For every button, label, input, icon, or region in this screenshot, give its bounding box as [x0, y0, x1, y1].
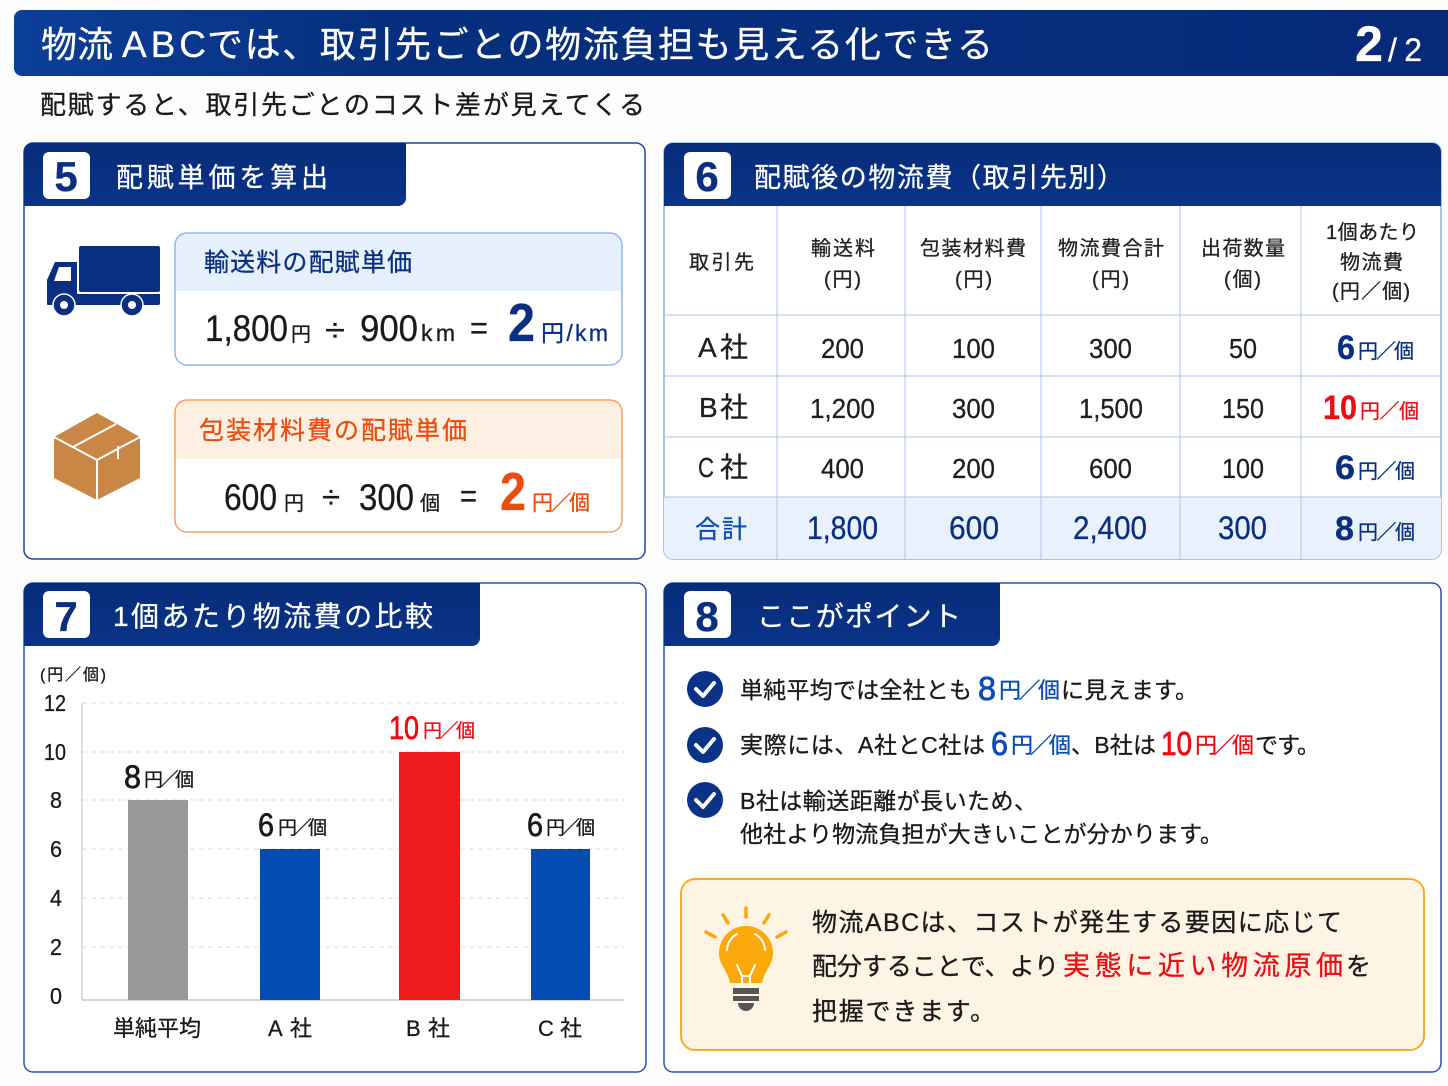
packaging unit price box: 300: [359, 477, 414, 518]
transport unit price box: km: [421, 320, 455, 346]
table row: B社: B: [699, 392, 718, 423]
panel 5 heading: 配賦単価を算出: [116, 163, 328, 193]
table row: total: 1,800: [807, 510, 878, 546]
table row: C社: 400: [821, 453, 864, 484]
point 3: [687, 782, 1223, 847]
title banner: [14, 10, 1448, 76]
table header row: (円): [1092, 269, 1129, 291]
table row: C社: 200: [952, 453, 995, 484]
bar: simple average: 円／個: [144, 769, 194, 791]
bar chart: 4: [50, 885, 62, 911]
callout text: を: [1346, 953, 1371, 981]
packaging unit price box: 円: [284, 493, 304, 515]
callout text: 把握できます。: [812, 998, 995, 1026]
bar: company B: 円／個: [423, 720, 475, 742]
table header row: [689, 221, 1419, 303]
packaging unit price box: 個: [420, 492, 440, 515]
icon: light bulb: [706, 908, 786, 1011]
table row: C社: [698, 449, 1415, 487]
packaging unit price box: [175, 400, 622, 532]
transport unit price box: 円: [291, 324, 311, 346]
panel 5: allocation unit price: [24, 143, 645, 559]
title: では、取引先ごとの物流負担も見える化できる: [207, 24, 993, 65]
table header row: 1個あたり: [1326, 221, 1419, 244]
panel 7 heading: 7: [54, 593, 78, 640]
table row: B社: 300: [952, 393, 995, 424]
bar chart: 2: [50, 934, 62, 960]
callout: [681, 879, 1424, 1050]
table grid: [664, 206, 1441, 559]
table row: A社: A: [698, 332, 717, 363]
table total row background: [664, 497, 1441, 559]
subtitle: 配賦すると、取引先ごとのコスト差が見えてくる: [40, 90, 645, 120]
panel 7 heading: [24, 583, 480, 646]
table row: A社: 200: [821, 333, 864, 364]
packaging unit price box: 包装材料費の配賦単価: [199, 417, 467, 445]
bar: simple average: 単純平均: [113, 1016, 201, 1041]
point 3: B社は輸送距離が長いため、: [740, 788, 1037, 814]
panel 6 heading: [664, 143, 1441, 206]
table header row: (円): [824, 269, 861, 291]
table row: C社: 6: [1335, 449, 1355, 487]
table row: total: 300: [1218, 510, 1267, 546]
point 1: 円／個: [999, 678, 1060, 703]
bar: company B: 10: [389, 710, 419, 746]
table row: total: [695, 510, 1415, 548]
table row: B社: 1,200: [810, 393, 875, 424]
packaging unit price box: =: [460, 478, 477, 514]
callout text: 実態に近い物流原価: [1063, 951, 1343, 981]
panel 6 heading: 6: [695, 153, 719, 200]
point 1: 8: [978, 670, 996, 707]
table row: A社: 50: [1229, 333, 1257, 364]
table row: A社: 円／個: [1358, 340, 1414, 363]
packaging unit price box: 600: [224, 477, 277, 518]
table row: C社: 円／個: [1358, 460, 1415, 483]
table row: B社: 社: [720, 392, 748, 423]
panel 8 heading: ここがポイント: [757, 601, 961, 632]
panel 8 heading: [664, 583, 1000, 646]
point 2: 円／個: [1011, 733, 1071, 758]
point 2: 実際には、A社とC社は: [740, 732, 985, 758]
bar chart: 6: [50, 836, 62, 862]
table row: C社: 社: [720, 452, 748, 483]
table header row: 取引先: [689, 251, 754, 274]
table row: A社: [698, 329, 1414, 367]
table row: B社: [699, 389, 1419, 427]
panel 7: cost per unit comparison: [24, 583, 646, 1072]
table row: A社: 6: [1337, 329, 1355, 367]
bar: simple average: [113, 759, 201, 1041]
table row: B社: 円／個: [1360, 400, 1419, 423]
table row: total: 合計: [695, 516, 747, 544]
table row: A社: 社: [720, 332, 748, 363]
table row: B社: 1,500: [1079, 393, 1143, 424]
page number: [1355, 16, 1422, 72]
title: 物流: [41, 24, 113, 65]
callout text: [812, 909, 1371, 1026]
transport unit price box: 1,800: [205, 308, 288, 349]
table row: C社: C: [698, 452, 714, 483]
panel 6 heading: 配賦後の物流費（取引先別）: [754, 163, 1124, 193]
table header row: 出荷数量: [1201, 237, 1285, 260]
bar chart: 10: [44, 739, 66, 765]
table row: total: 600: [949, 510, 999, 546]
callout text: 配分することで、より: [812, 953, 1059, 981]
table header row: 包装材料費: [920, 237, 1026, 260]
bar: company C: [527, 807, 595, 1041]
icon: truck: [47, 246, 160, 316]
transport unit price box: 輸送料の配賦単価: [204, 249, 412, 277]
callout text: 物流ABCは、コストが発生する要因に応じて: [812, 909, 1342, 937]
point 1: に見えます。: [1061, 677, 1198, 703]
table header row: 輸送料: [811, 237, 875, 260]
table header row: (円／個): [1332, 280, 1410, 303]
transport unit price box: [175, 233, 622, 365]
bar: company C: C社: [538, 1016, 582, 1041]
table row: A社: 100: [952, 333, 995, 364]
packaging unit price box: ÷: [322, 479, 340, 515]
packaging unit price box: 2: [500, 462, 526, 522]
bar: company A: [258, 807, 327, 1041]
panel 5 heading: 5: [54, 153, 78, 200]
table row: B社: 150: [1222, 393, 1264, 424]
transport unit price box: 2: [508, 293, 535, 353]
transport unit price box: ÷: [325, 312, 345, 348]
point 2: です。: [1255, 732, 1320, 758]
bar chart: 0: [50, 983, 62, 1009]
panel 6: logistics cost by customer: [664, 143, 1441, 559]
transport unit price box: 円/km: [541, 320, 608, 346]
panel 8: key points: [664, 583, 1441, 1072]
table header row: (円): [955, 269, 992, 291]
bar chart: [40, 666, 624, 1041]
table row: total: 2,400: [1073, 510, 1147, 546]
point 2: 6: [991, 725, 1008, 762]
bar chart: 12: [44, 690, 66, 716]
bar: company A: A社: [268, 1016, 312, 1041]
bar: company C: 6: [527, 807, 543, 843]
table row: C社: 100: [1222, 453, 1264, 484]
bar: company A: 円／個: [278, 817, 327, 839]
point 2: 10: [1161, 725, 1192, 762]
title: ABC: [122, 24, 206, 65]
packaging unit price box: 円／個: [532, 492, 590, 515]
bar: company A: 6: [258, 807, 274, 843]
point 1: [687, 670, 1198, 707]
point 2: [687, 725, 1320, 763]
panel 7 heading: 1個あたり物流費の比較: [113, 601, 433, 632]
table row: A社: 300: [1089, 333, 1132, 364]
bar: simple average: 8: [124, 759, 141, 795]
point 3: 他社より物流負担が大きいことが分かります。: [740, 821, 1223, 847]
page number: 2: [1355, 16, 1383, 72]
table row: total: 8: [1335, 510, 1354, 548]
panel 5 heading: [24, 143, 406, 206]
bar chart: (円／個): [40, 666, 106, 684]
point 2: 、B社は: [1071, 732, 1156, 758]
bar: company C: 円／個: [546, 817, 595, 839]
bar: company B: [389, 710, 475, 1041]
table header row: 物流費: [1340, 251, 1403, 274]
icon: cardboard box: [54, 413, 140, 500]
point 1: 単純平均では全社とも: [740, 677, 972, 703]
table header row: (個): [1224, 268, 1261, 291]
bar: company B: B社: [406, 1016, 450, 1041]
point 2: 円／個: [1195, 733, 1254, 758]
table row: total: 円／個: [1358, 521, 1415, 544]
page number: /2: [1388, 32, 1422, 68]
transport unit price box: 900: [360, 308, 418, 349]
table row: C社: 600: [1089, 453, 1132, 484]
panel 8 heading: 8: [695, 593, 719, 640]
table row: B社: 10: [1323, 389, 1357, 427]
transport unit price box: =: [470, 310, 488, 346]
bar chart: 8: [50, 787, 62, 813]
table header row: 物流費合計: [1058, 237, 1164, 260]
